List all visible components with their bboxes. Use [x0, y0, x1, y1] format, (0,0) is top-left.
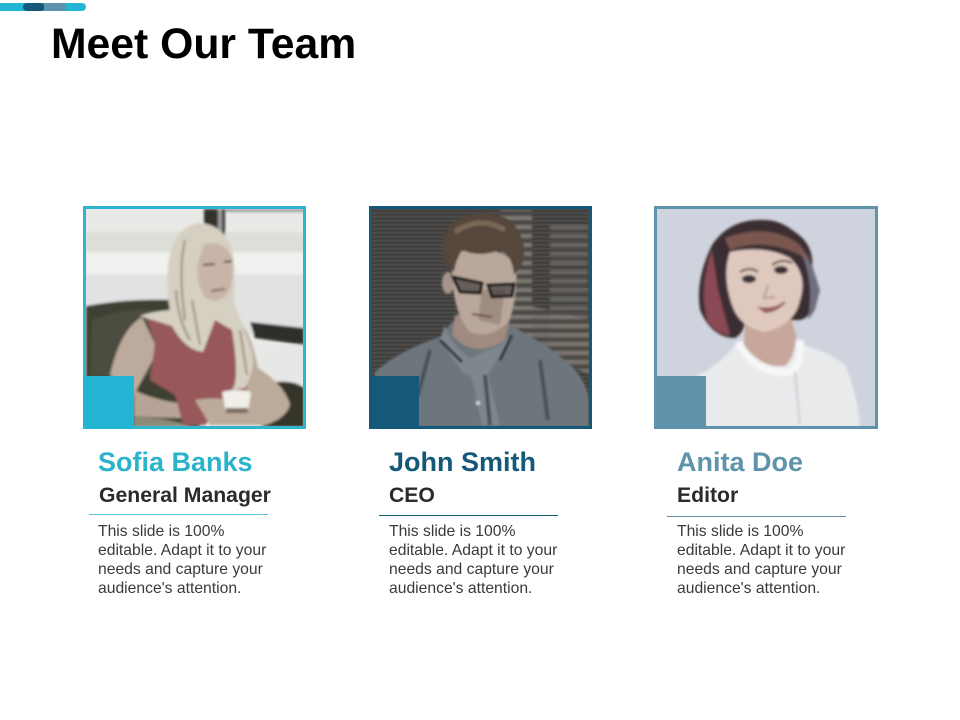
title: Meet Our Team: [51, 20, 356, 68]
description: This slide is 100%: [98, 523, 224, 540]
description: This slide is 100%: [389, 523, 515, 540]
hair: [699, 220, 817, 338]
description: needs and capture your: [389, 561, 554, 578]
divider: [379, 515, 558, 516]
arm: [110, 317, 158, 395]
name: Anita Doe: [677, 447, 803, 477]
divider: [667, 516, 846, 517]
description: audience's attention.: [677, 580, 820, 597]
divider: [89, 514, 268, 515]
name: Sofia Banks: [98, 447, 253, 477]
name: John Smith: [389, 447, 536, 477]
description: This slide is 100%: [677, 523, 803, 540]
cup: [222, 390, 251, 412]
portrait: Anita Doe: [654, 206, 878, 429]
hair: [443, 213, 524, 275]
description: editable. Adapt it to your: [389, 542, 557, 559]
portrait: Sofia Banks: [83, 206, 306, 429]
description: [677, 523, 846, 597]
neck: [452, 310, 512, 349]
description: audience's attention.: [98, 580, 241, 597]
accent square: [369, 376, 419, 429]
description: needs and capture your: [677, 561, 842, 578]
accent square: [654, 376, 706, 429]
description: needs and capture your: [98, 561, 263, 578]
role: Editor: [677, 484, 738, 507]
shirt: [375, 322, 589, 427]
top: [145, 315, 248, 425]
decorative header bar: [0, 3, 86, 11]
description: editable. Adapt it to your: [677, 542, 845, 559]
right arm: [240, 322, 290, 426]
description: audience's attention.: [389, 580, 532, 597]
face: [726, 250, 802, 332]
shirt: [695, 342, 860, 427]
hair: [140, 223, 253, 390]
face: [197, 243, 233, 301]
description: [98, 523, 266, 597]
neck: [744, 315, 796, 366]
face: [452, 249, 516, 334]
description: editable. Adapt it to your: [98, 542, 266, 559]
description: [389, 523, 558, 597]
portrait: John Smith: [369, 206, 592, 429]
role: CEO: [389, 484, 435, 507]
role: General Manager: [99, 484, 271, 507]
glasses: [453, 277, 514, 297]
accent square: [83, 376, 134, 429]
